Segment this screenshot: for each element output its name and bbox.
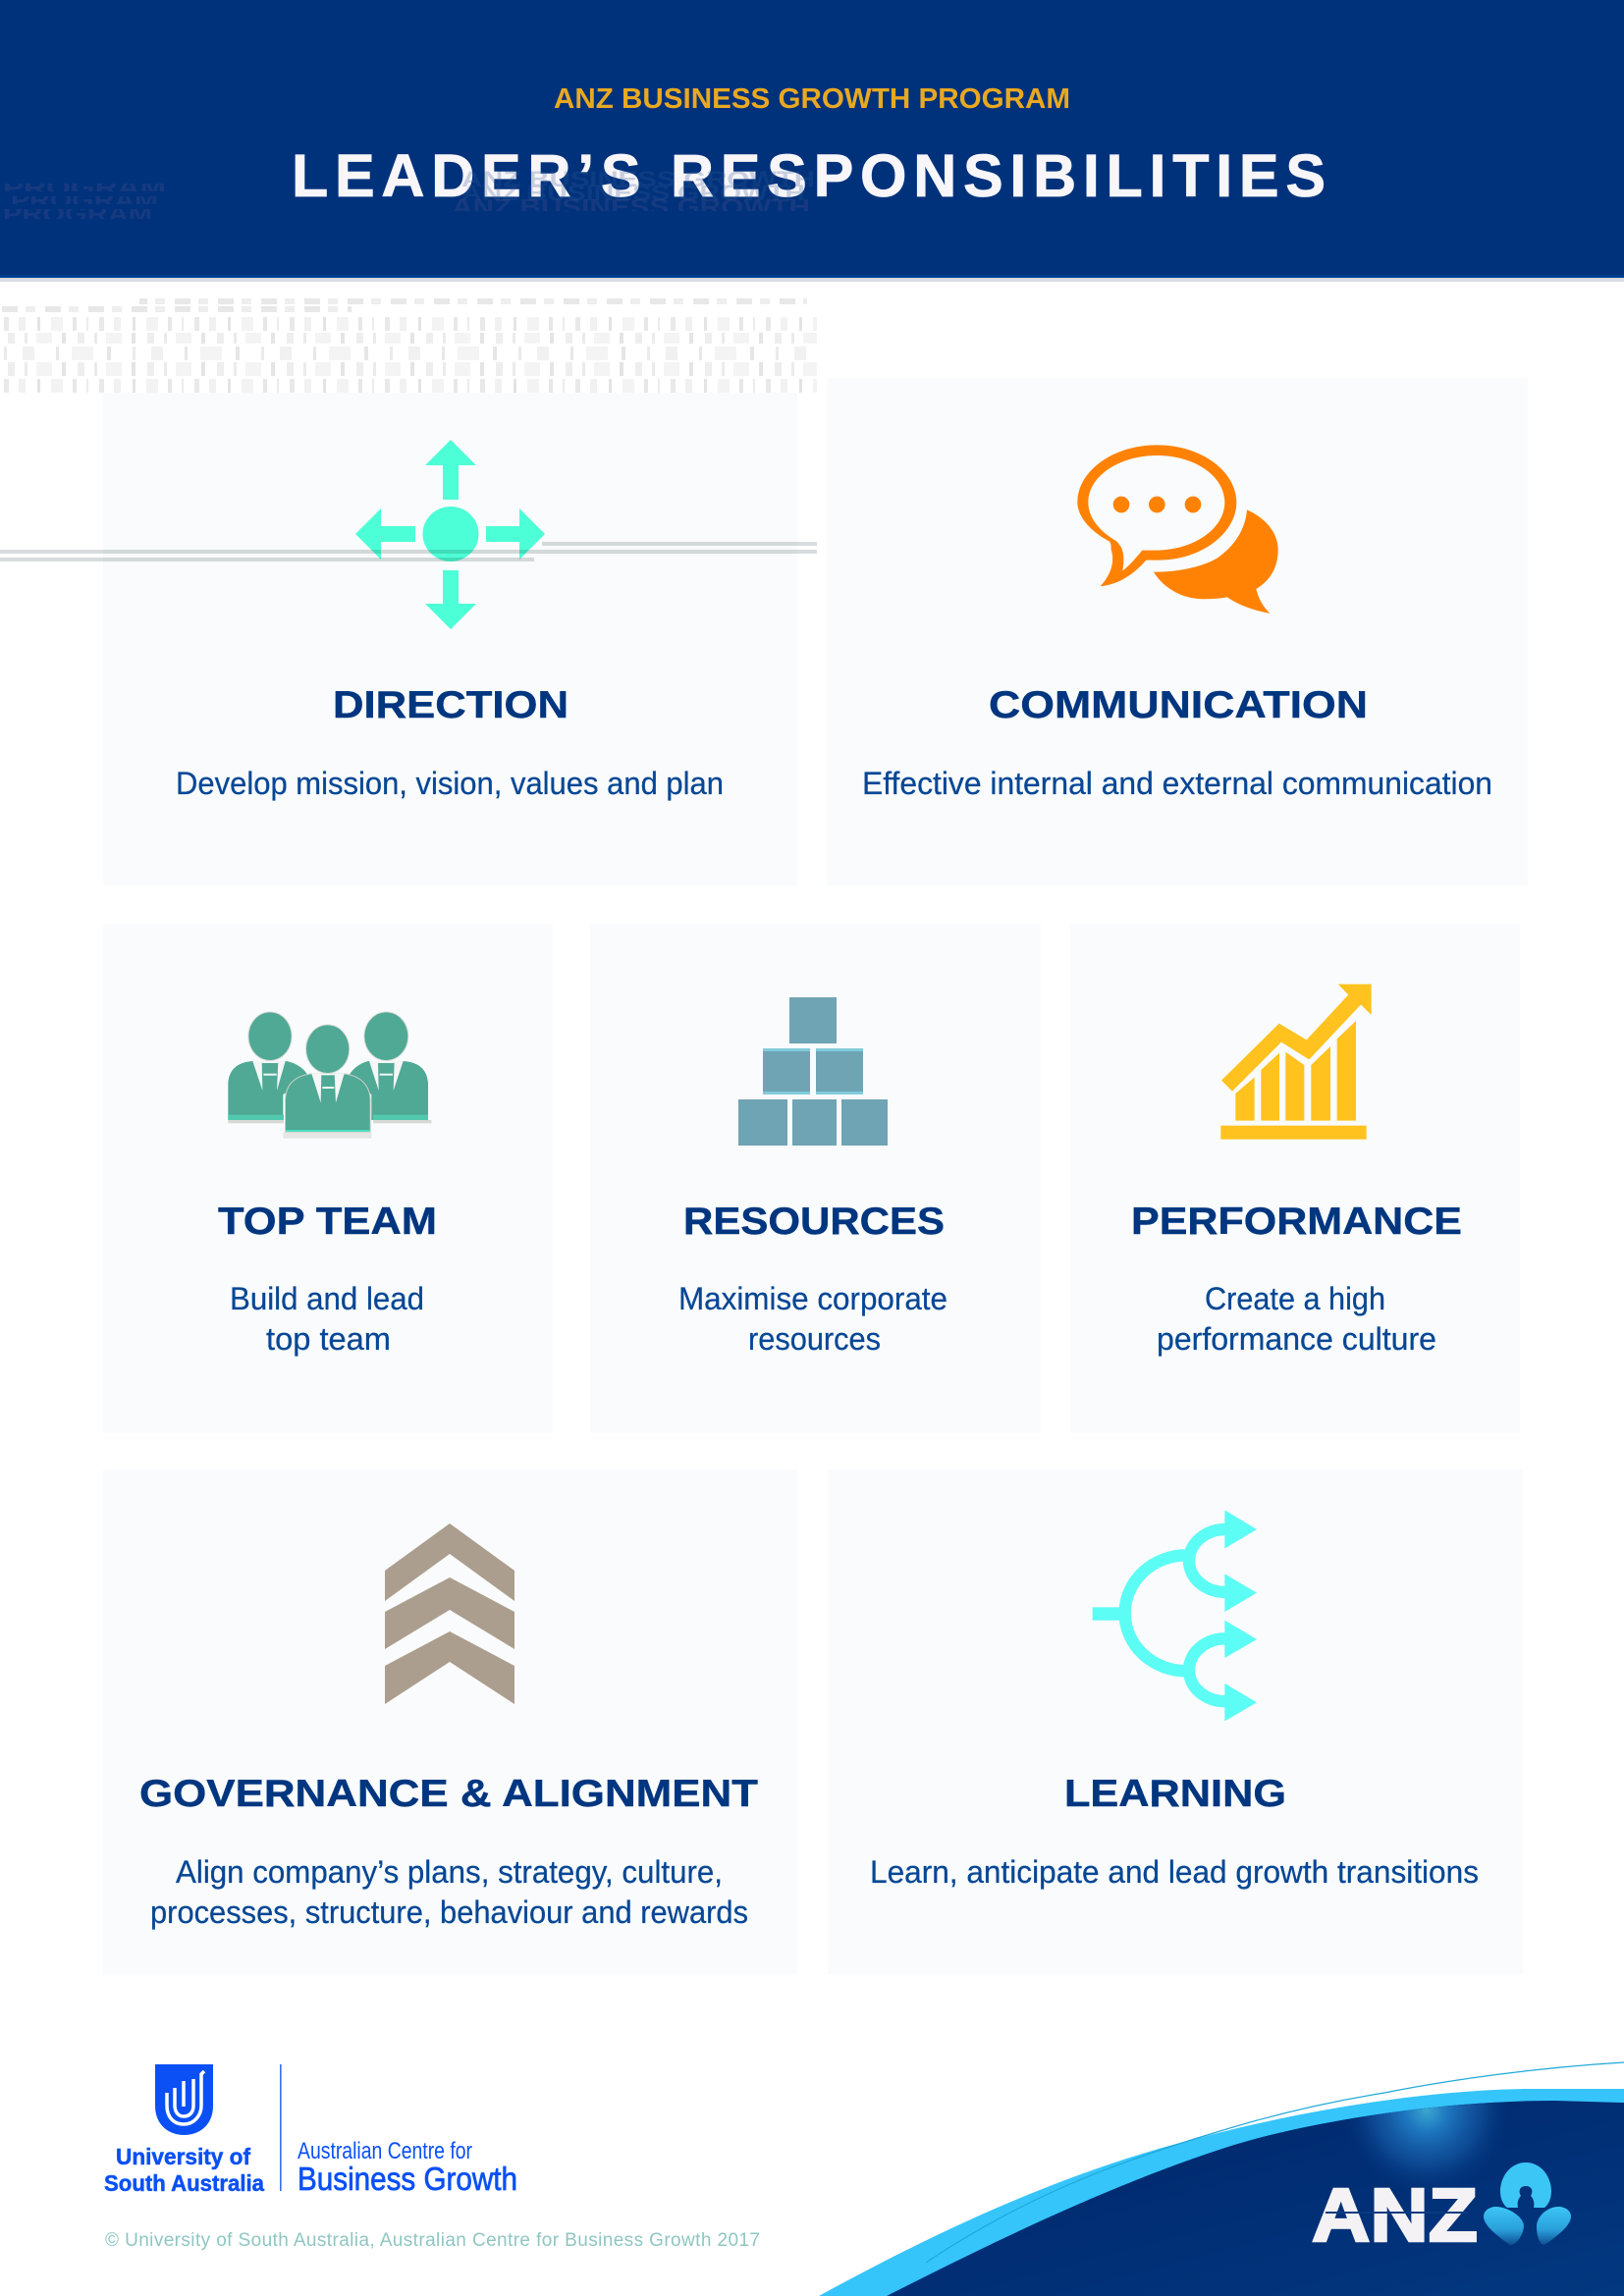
panel: performance [1070,924,1520,1433]
ghost header text: program: PROGRAM [3,175,166,201]
performance description [1157,1281,1436,1357]
icon: rising bar chart [1220,985,1372,1140]
university name [104,2144,264,2196]
communication heading: COMMUNICATION [989,684,1368,726]
ghost text over title: ANZ BUSINESS GROWTH [461,181,805,205]
university name: University of [116,2144,250,2169]
title: LEADER’S RESPONSIBILITIES [292,142,1326,209]
governance heading: GOVERNANCE & ALIGNMENT [139,1773,758,1815]
ghost header text: program: PROGRAM [3,201,152,228]
bottom right swoosh [819,2062,1624,2296]
resources description: Maximise corporate [678,1281,947,1316]
resources description [678,1281,947,1357]
ANZ wordmark: ANZ [1312,2173,1478,2258]
ghost header text: business growth: ANZ BUSINESS GROWTH [452,194,810,221]
swoosh navy fill [887,2101,1624,2296]
direction heading: DIRECTION [333,684,568,726]
top team description [230,1281,424,1357]
icon: upward chevrons [385,1523,514,1704]
panel: resources [590,924,1041,1433]
learning description: Learn, anticipate and lead growth transitions [870,1854,1479,1890]
resources description: resources [748,1321,881,1357]
direction description: Develop mission, vision, values and plan [176,766,724,801]
learning card background [828,1469,1523,1975]
top team heading: TOP TEAM [218,1201,437,1243]
communication card background [827,378,1528,885]
centre name [298,2138,517,2197]
university logo lockup [104,2064,517,2197]
swoosh glow [887,2101,1624,2296]
top team description: top team [266,1321,391,1357]
direction card background [103,378,797,885]
ghost text over title: ANZ BUSINESS GROWTH [461,167,815,191]
learning heading: LEARNING [1064,1773,1286,1815]
icon: four-way arrows [355,440,545,629]
panel: communication [827,378,1528,885]
icon: branching arrows [1093,1510,1257,1721]
subtitle: ANZ BUSINESS GROWTH PROGRAM [554,83,1070,115]
icon: university shield [155,2064,213,2135]
performance description: Create a high [1205,1281,1385,1316]
governance description: Align company’s plans, strategy, culture, [176,1854,723,1890]
swoosh thin line [926,2062,1624,2263]
icon: ANZ people symbol [1484,2163,1571,2245]
governance description [150,1854,748,1930]
icon: stacked blocks [738,997,888,1146]
ghost text artefact block [0,294,817,393]
panel: direction [103,378,797,885]
communication description: Effective internal and external communication [862,766,1492,801]
panel: learning [828,1469,1523,1975]
performance card background [1070,924,1520,1433]
resources heading: RESOURCES [683,1201,945,1243]
top team card background [103,924,553,1433]
panel: governance and alignment [103,1469,797,1975]
swoosh light blue band [819,2089,1624,2296]
icon: three people [228,1012,431,1139]
governance card background [103,1469,797,1975]
logo divider [280,2064,282,2191]
governance description: processes, structure, behaviour and rewards [150,1895,748,1930]
top team description: Build and lead [230,1281,424,1316]
header band [0,0,1624,282]
centre name: Australian Centre for [298,2138,472,2164]
ghost header text: program: PROGRAM [11,187,158,214]
copyright line: © University of South Australia, Australian Centre for Business Growth 2017 [105,2230,760,2251]
performance heading: PERFORMANCE [1131,1201,1462,1243]
icon: speech bubbles [1077,445,1278,614]
centre name: Business Growth [298,2161,517,2197]
ghost text over title [461,167,815,205]
panel: top team [103,924,553,1433]
performance description: performance culture [1157,1321,1436,1357]
university name: South Australia [104,2170,264,2196]
resources card background [590,924,1041,1433]
ghost grey rules [0,542,817,561]
ghost header text: program [5,184,164,219]
